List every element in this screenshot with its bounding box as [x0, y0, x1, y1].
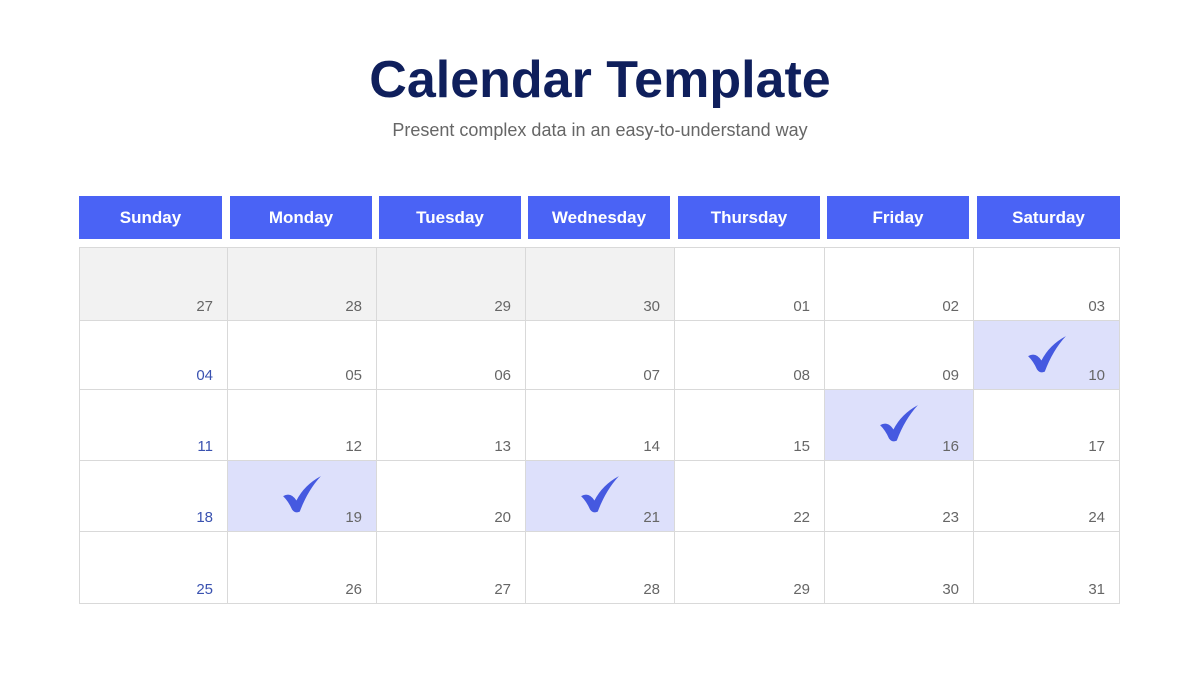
calendar grid: 09 — [942, 367, 959, 384]
highlighted day 19 with checkmark — [227, 460, 377, 532]
calendar grid: 23 — [942, 509, 959, 526]
highlighted day 21 with checkmark — [525, 460, 675, 532]
header row: Friday — [872, 208, 924, 227]
calendar grid: 29 — [494, 298, 511, 315]
calendar grid: 08 — [793, 367, 810, 384]
calendar grid: 28 — [345, 298, 362, 315]
calendar grid: 24 — [1088, 509, 1105, 526]
title: Calendar Template — [369, 51, 831, 109]
highlighted day 19 with checkmark: 19 — [345, 509, 362, 526]
calendar grid: 15 — [793, 438, 810, 455]
calendar grid: 04 — [196, 367, 213, 384]
subtitle: Present complex data in an easy-to-understand way — [392, 120, 808, 140]
calendar grid: 26 — [345, 581, 362, 598]
header row: Saturday — [1012, 208, 1085, 227]
calendar grid: 03 — [1088, 298, 1105, 315]
calendar grid: 05 — [345, 367, 362, 384]
highlighted day 16 with checkmark — [824, 389, 974, 461]
header row: Monday — [269, 208, 333, 227]
header row — [79, 196, 1120, 239]
header row: Wednesday — [552, 208, 646, 227]
calendar grid: 07 — [643, 367, 660, 384]
calendar grid: 29 — [793, 581, 810, 598]
calendar grid: 28 — [643, 581, 660, 598]
calendar grid: 25 — [196, 581, 213, 598]
calendar grid: 18 — [196, 509, 213, 526]
calendar grid: 31 — [1088, 581, 1105, 598]
calendar grid: 30 — [643, 298, 660, 315]
calendar grid: 17 — [1088, 438, 1105, 455]
calendar grid: 20 — [494, 509, 511, 526]
calendar grid: 30 — [942, 581, 959, 598]
header row: Tuesday — [416, 208, 484, 227]
calendar grid: 13 — [494, 438, 511, 455]
calendar grid: 01 — [793, 298, 810, 315]
calendar grid: 22 — [793, 509, 810, 526]
header row: Sunday — [120, 208, 181, 227]
header row: Thursday — [711, 208, 787, 227]
calendar grid: 27 — [494, 581, 511, 598]
calendar grid: 11 — [197, 438, 213, 455]
calendar grid: 12 — [345, 438, 362, 455]
calendar grid: 14 — [643, 438, 660, 455]
calendar grid: 27 — [196, 298, 213, 315]
highlighted day 10 with checkmark — [973, 320, 1120, 390]
highlighted day 21 with checkmark: 21 — [643, 509, 660, 526]
highlighted day 16 with checkmark: 16 — [942, 438, 959, 455]
calendar grid: 06 — [494, 367, 511, 384]
highlighted day 10 with checkmark: 10 — [1088, 367, 1105, 384]
calendar grid: 02 — [942, 298, 959, 315]
